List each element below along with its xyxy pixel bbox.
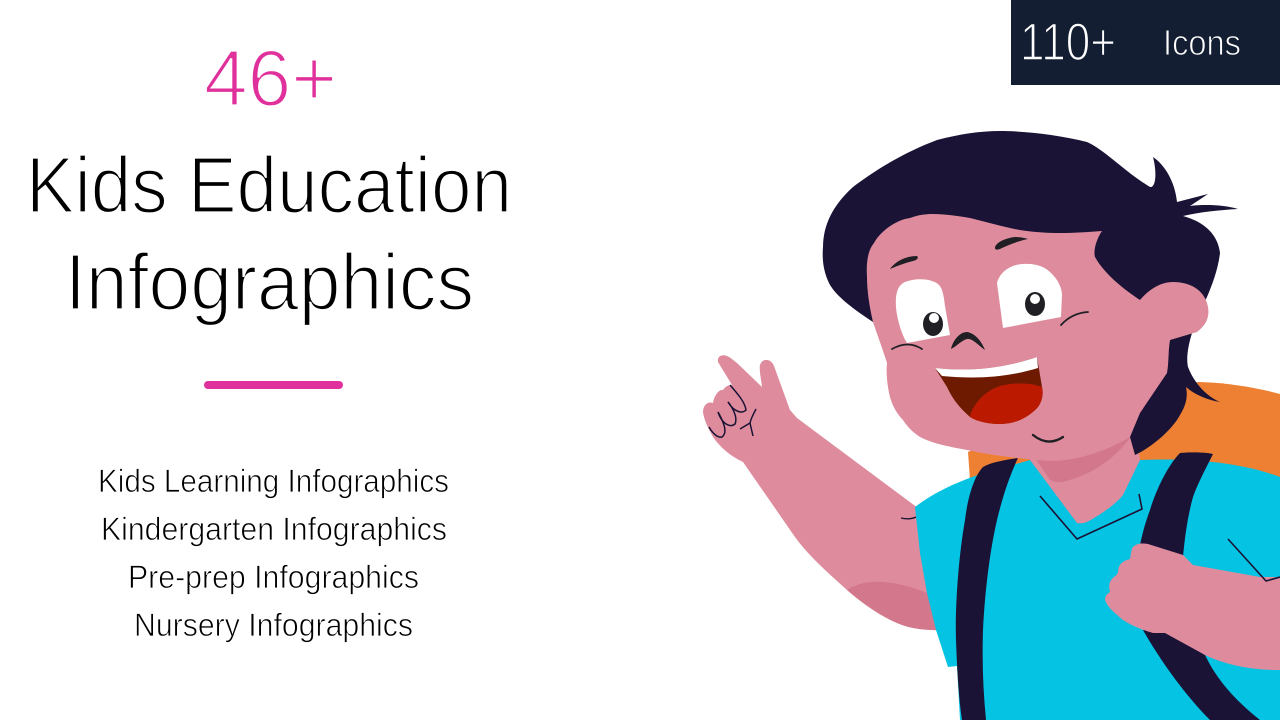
topic list: Kids Learning Infographics (98, 463, 449, 499)
eye creases and chin smile (892, 312, 1088, 442)
left backpack strap (956, 458, 1018, 720)
shirt (915, 460, 1280, 720)
right eye (997, 264, 1062, 328)
face (867, 214, 1208, 461)
icon count badge: Icons (1163, 22, 1241, 63)
lower backpack strap (1143, 630, 1260, 720)
count heading: 46+: 46+ (204, 34, 337, 122)
topic list (98, 463, 449, 643)
sleeve line (1228, 539, 1280, 581)
nose (951, 332, 985, 350)
elbow crease (901, 517, 916, 519)
icon count badge (1011, 0, 1280, 85)
hand holding strap (1105, 543, 1280, 670)
hair (823, 131, 1238, 330)
finger lines (709, 385, 756, 437)
topic list: Kindergarten Infographics (101, 511, 447, 547)
right backpack strap (1140, 452, 1213, 557)
mouth (935, 357, 1043, 424)
raised arm and hand (703, 355, 948, 630)
neck (1030, 420, 1140, 523)
pink divider bar (204, 381, 343, 389)
neck shadow (1033, 435, 1132, 482)
title (26, 140, 512, 326)
topic list: Pre-prep Infographics (128, 559, 419, 595)
title: Infographics (65, 238, 474, 326)
topic list: Nursery Infographics (134, 607, 413, 643)
left eye (896, 279, 950, 343)
elbow shadow (847, 582, 945, 630)
collar line (1040, 494, 1142, 539)
illustration: boy with backpack (703, 131, 1280, 720)
icon count badge: 110+ (1020, 13, 1116, 72)
back hair (1120, 330, 1220, 455)
title: Kids Education (26, 140, 512, 230)
eyebrows (890, 237, 1028, 269)
backpack (968, 382, 1280, 480)
